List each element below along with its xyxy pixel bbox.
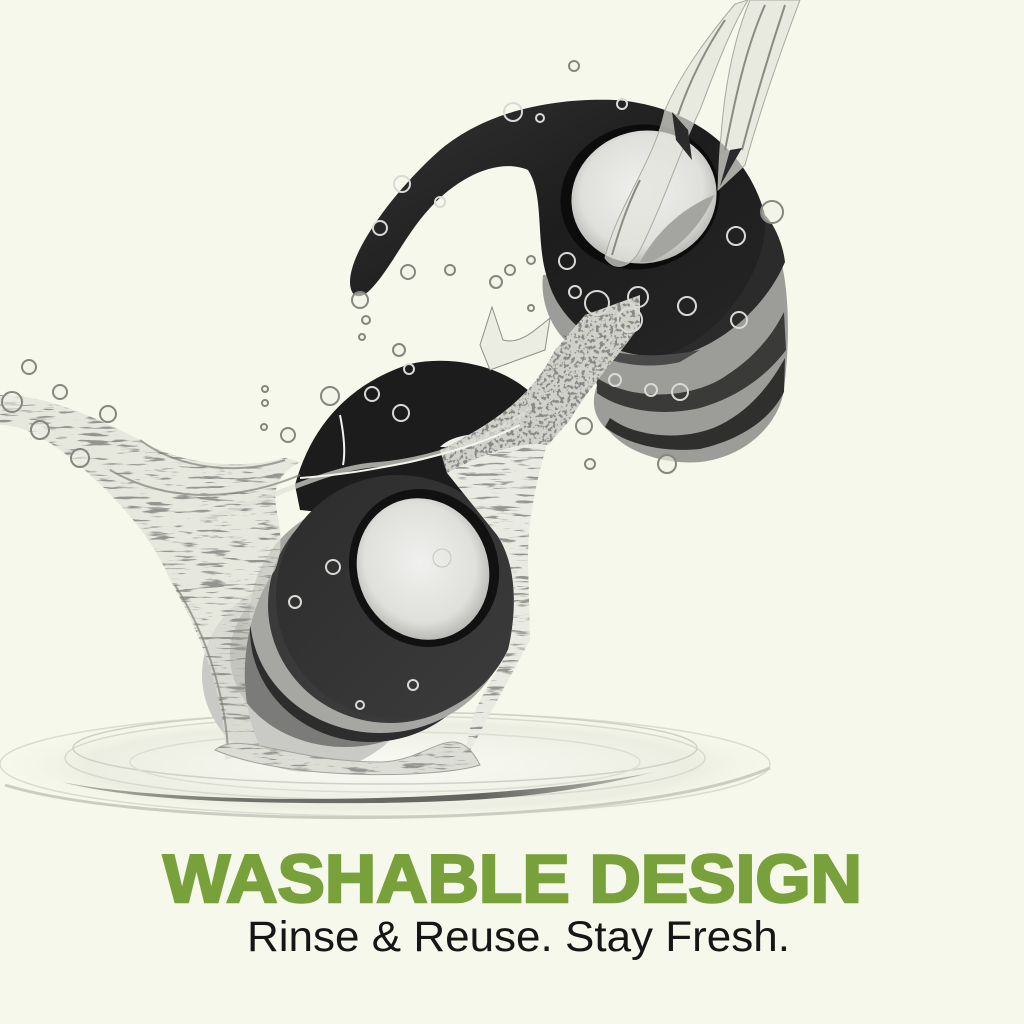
lower plug stem	[295, 361, 545, 520]
lower earplug	[202, 361, 545, 772]
water droplets on background	[2, 61, 783, 473]
splash right sheet	[447, 435, 548, 760]
upper earplug	[350, 100, 788, 463]
subtitle: Rinse & Reuse. Stay Fresh.	[247, 913, 790, 961]
water droplets on plugs	[289, 99, 747, 709]
water pool with ripples	[0, 709, 795, 823]
upper plug dome	[544, 107, 736, 287]
splash crossing ribbon	[200, 410, 530, 520]
stream ribbon left	[605, 0, 748, 266]
splash base	[215, 742, 480, 775]
splash left sheet	[0, 395, 300, 760]
splash thin jet	[480, 307, 550, 370]
upper plug rib stack	[542, 215, 788, 463]
stream ribbon right	[718, 0, 800, 190]
title: WASHABLE DESIGN	[163, 841, 862, 917]
stem inner highlight	[440, 430, 490, 447]
lower plug ribs	[202, 487, 512, 772]
splash arm	[440, 295, 640, 473]
water splash crown	[0, 295, 640, 775]
upper plug hook and head	[350, 100, 765, 356]
head lower sheen	[563, 335, 700, 366]
lower plug dome	[323, 464, 525, 672]
dome water tint	[640, 195, 714, 262]
lower plug body	[276, 475, 520, 719]
pouring water stream	[605, 0, 800, 266]
